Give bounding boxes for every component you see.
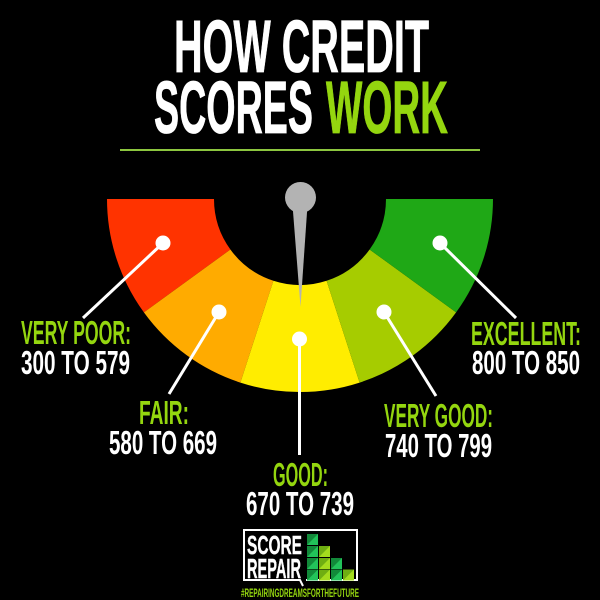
label: good [246,456,354,522]
label: fair: 580 TO 669 [109,424,217,461]
label: very poor: VERY POOR: [21,314,131,351]
label: fair: FAIR: [139,394,189,431]
title [154,5,448,149]
pointer: fair [169,304,226,394]
label: very good: VERY GOOD: [384,397,493,434]
segment: excellent [370,199,493,312]
label: excellent [471,315,581,381]
hashtag: #REPAIRINGDREAMSFORTHEFUTURE [241,586,359,600]
logo frame [244,530,357,586]
pointer: very good [376,304,436,396]
logo wordmark [247,530,302,584]
segment: very poor [107,199,230,312]
logo wordmark: REPAIR [247,553,301,584]
pointer: excellent [432,236,516,318]
label: very good: 740 TO 799 [385,427,492,464]
label: very good [384,397,493,464]
label: fair [109,394,217,461]
label: good: GOOD: [273,456,328,493]
pointer: very poor [83,236,170,318]
gauge [107,199,493,392]
label: good: 670 TO 739 [246,485,354,522]
title: WORK [326,66,448,149]
pointer: good [292,332,307,455]
logo wordmark: SCORE [247,530,302,560]
segment: very good [327,250,456,383]
logo: score repair [241,530,359,600]
logo icon: green squares [307,534,354,580]
segment: good [240,281,360,392]
title: SCORES [154,66,313,149]
segment: fair [144,250,273,383]
needle [285,182,316,307]
label: very poor [21,314,131,381]
label: very poor: 300 TO 579 [21,344,130,381]
